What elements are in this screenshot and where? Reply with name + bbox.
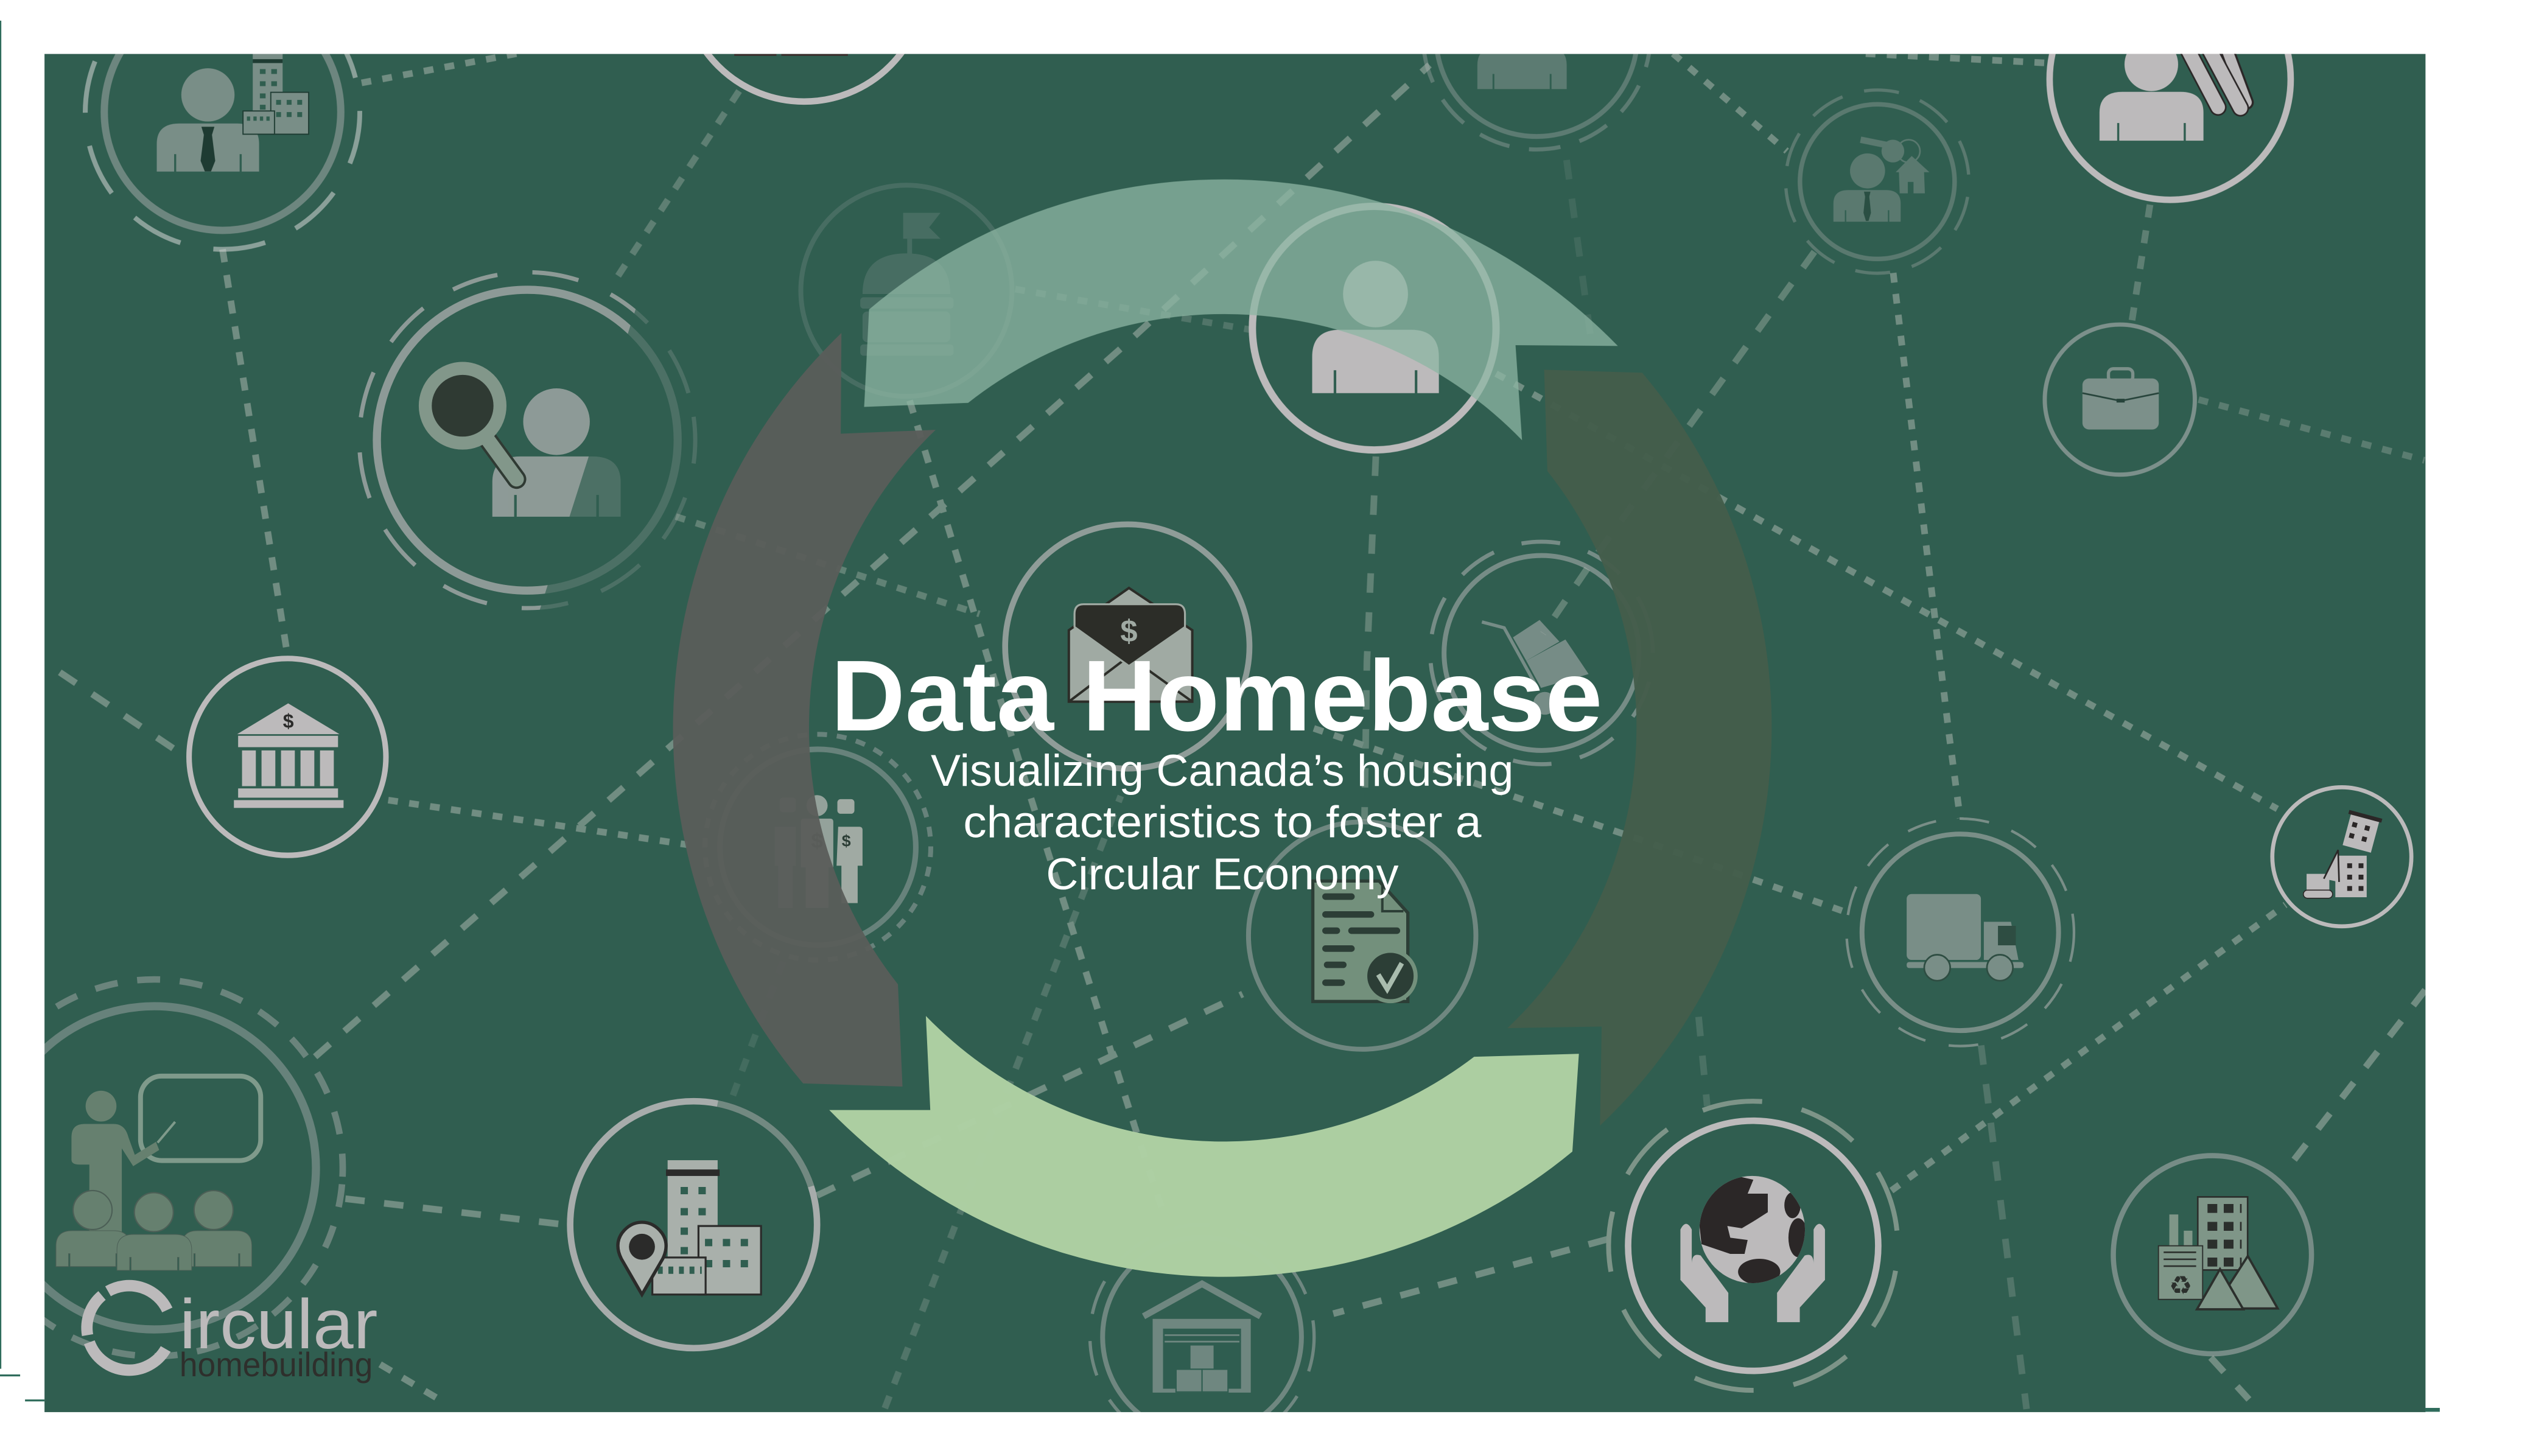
icon: partial top circle [682,0,925,102]
icon: factory with recycling and piles [2114,1156,2311,1354]
icon: document with check [1249,822,1476,1049]
arrow: bottom cycle arrow [829,1016,1579,1277]
icon: family with dollar signs and locks: $ [811,830,823,853]
logo: Circular homebuilding: homebuilding [180,1345,373,1384]
subtitle text block [931,746,1513,899]
subtitle text block: Visualizing Canada’s housing [931,746,1513,796]
icon: partial top person circle [1422,54,1651,152]
logo: Circular homebuilding: ircular [180,1286,377,1363]
icon: envelope with dollar: $ [1120,614,1138,648]
icon: factory with recycling and piles: ♻ [2169,1271,2192,1301]
icon: person centre top [1252,206,1496,450]
subtitle text block: Circular Economy [1046,849,1399,899]
icon: delivery truck [1846,819,2074,1046]
icon: city buildings with location pin [570,1101,817,1348]
subtitle text block: characteristics to foster a [963,797,1482,847]
icon: envelope with dollar [1005,524,1250,769]
arrow: right cycle arrow [1507,369,1771,1125]
arrow: left cycle arrow [673,333,936,1087]
arrow: top cycle arrow [864,180,1618,440]
icon: briefcase [2045,324,2195,475]
icon: capitol building [801,185,1012,396]
title: Data Homebase [831,640,1602,752]
icon: bank [189,659,386,855]
icon: crane demolishing building [2272,787,2411,926]
icon: globe held in hands [1556,1048,1950,1443]
icon: agent with key and house [1784,88,1970,275]
icon: hand cart with boxes [1429,539,1636,766]
icon: family with dollar signs and locks [705,734,931,960]
logo: Circular homebuilding [87,1286,377,1384]
icon: person with magnifying glass [358,270,698,610]
icon: bank: $ [283,710,294,732]
icon: family with dollar signs and locks: $ [842,831,851,850]
icon: teacher with students [44,976,346,1359]
icon: warehouse [1090,1225,1314,1449]
icon: executive with office buildings [83,54,362,252]
icon: person with tools top right [2047,54,2294,203]
